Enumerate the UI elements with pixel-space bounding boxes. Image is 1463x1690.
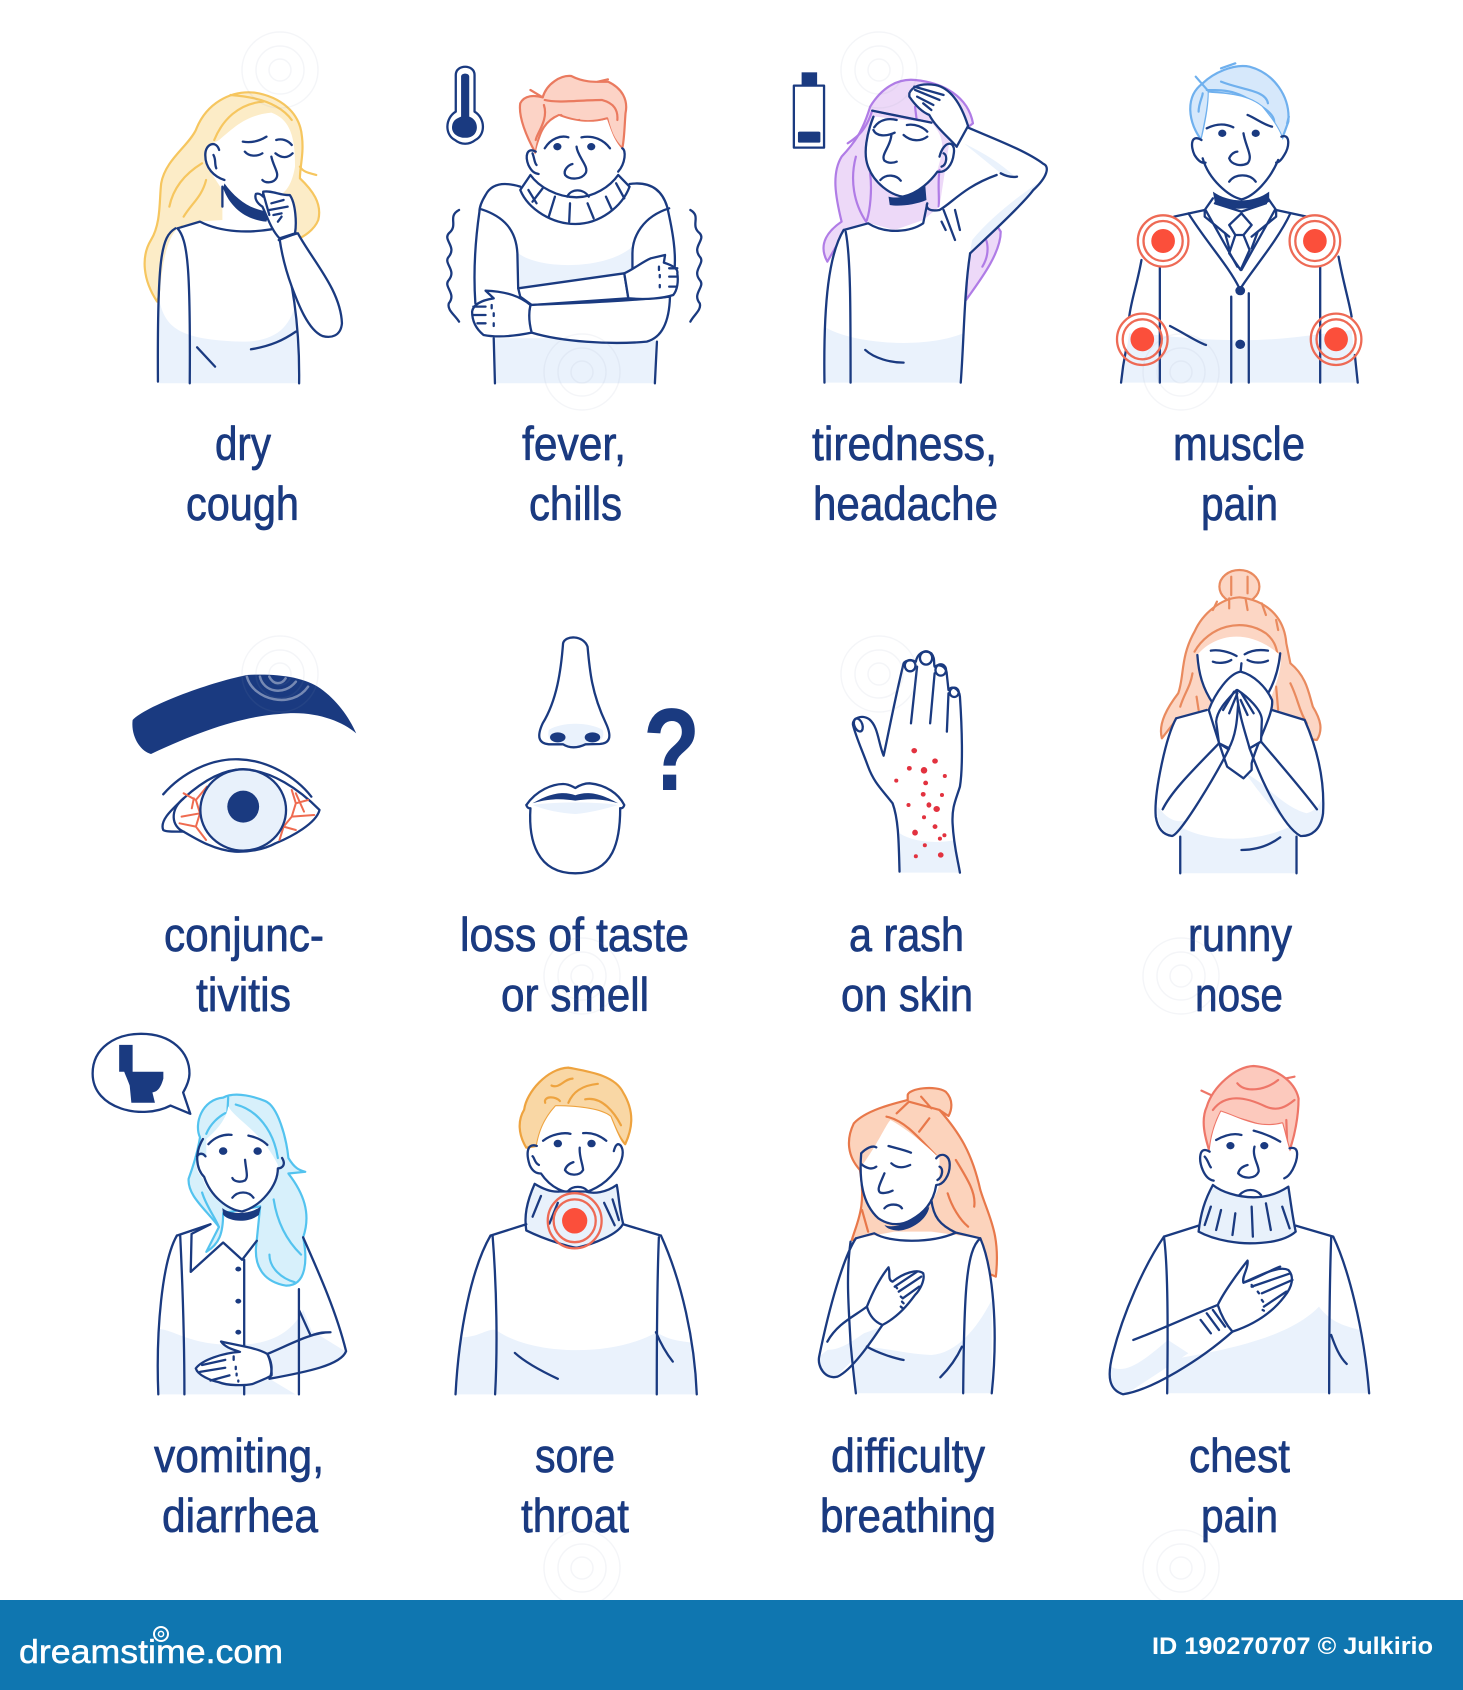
figure: hand with rash: [852, 651, 962, 873]
label: muscle pain: [1173, 417, 1305, 530]
label: runny nose: runny: [1188, 908, 1292, 961]
panel: runny nose: [1156, 570, 1323, 1021]
label: conjunc-tivitis: tivitis: [196, 968, 291, 1021]
label: fever, chills: chills: [529, 477, 622, 530]
eyebrow: [132, 675, 356, 754]
label: chest pain: pain: [1201, 1489, 1278, 1542]
label: a rash on skin: on skin: [841, 968, 973, 1021]
label: chest pain: [1189, 1429, 1290, 1542]
icon: pain ring on throat: [548, 1193, 602, 1248]
panel: dry cough: [145, 92, 342, 530]
label: a rash on skin: a rash: [849, 908, 964, 961]
label: runny nose: [1188, 908, 1292, 1021]
figure: man with sore throat: [456, 1068, 697, 1394]
label: dry cough: cough: [186, 477, 299, 530]
figure: woman with stomach ache: [93, 1034, 346, 1394]
label: tiredness, headache: tiredness,: [812, 417, 997, 470]
panel: tiredness, headache: [794, 72, 1047, 530]
label: conjunc-tivitis: conjunc-: [164, 908, 324, 961]
figure: woman coughing: [145, 92, 342, 383]
figure: nose, tongue and question mark: [526, 637, 624, 873]
label: sore throat: throat: [521, 1489, 629, 1542]
icon: pain ring, right elbow: [1311, 314, 1361, 365]
label: vomiting, diarrhea: vomiting,: [154, 1429, 324, 1482]
mouth and tongue: [526, 783, 624, 873]
figure: shivering man with thermometer: [447, 67, 701, 383]
icon: speech bubble with toilet: [93, 1034, 190, 1114]
logo: dreamstime.com: dreamstime.com: [19, 1633, 283, 1670]
icon: thermometer: [447, 67, 483, 144]
panel: difficulty breathing: [819, 1088, 997, 1542]
icon: question mark: ?: [643, 685, 700, 815]
panel: loss of taste or smell: [460, 637, 700, 1021]
label: tiredness, headache: headache: [813, 477, 998, 530]
label: muscle pain: muscle: [1173, 417, 1305, 470]
label: a rash on skin: [841, 908, 973, 1021]
label: sore throat: [521, 1429, 629, 1542]
icon: pain ring, left shoulder: [1138, 215, 1188, 267]
credit: image ID: ID 190270707 © Julkirio: [1152, 1633, 1433, 1660]
icon: low battery: [794, 72, 824, 148]
figure: woman blowing nose: [1156, 570, 1323, 873]
eye: [163, 759, 320, 852]
panel: a rash on skin: [841, 651, 973, 1021]
nose: [539, 637, 609, 747]
figure: man with joint pain: [1117, 63, 1361, 383]
label: difficulty breathing: difficulty: [831, 1429, 985, 1482]
label: sore throat: sore: [535, 1429, 615, 1482]
label: difficulty breathing: breathing: [820, 1489, 996, 1542]
label: tiredness, headache: [812, 417, 998, 530]
label: loss of taste or smell: or smell: [501, 968, 649, 1021]
label: dry cough: [186, 417, 299, 530]
label: muscle pain: pain: [1201, 477, 1278, 530]
label: fever, chills: fever,: [522, 417, 626, 470]
figure: red eye and eyebrow: [132, 675, 356, 852]
figure: woman with hand on chest: [819, 1088, 997, 1393]
label: fever, chills: [522, 417, 626, 530]
label: dry cough: dry: [215, 417, 271, 470]
label: vomiting, diarrhea: diarrhea: [162, 1489, 319, 1542]
footer band: [0, 1600, 1463, 1690]
label: vomiting, diarrhea: [154, 1429, 324, 1542]
panel: vomiting, diarrhea: [93, 1034, 346, 1542]
icon: pain ring, right shoulder: [1290, 215, 1340, 267]
panel: conjunctivitis: [132, 675, 356, 1021]
figure: man with hand on chest: [1109, 1066, 1369, 1394]
panel: fever, chills: [447, 67, 701, 530]
label: loss of taste or smell: loss of taste: [460, 908, 689, 961]
rash dots: [894, 748, 947, 858]
label: loss of taste or smell: [460, 908, 689, 1021]
panel: muscle pain: [1117, 63, 1361, 530]
label: conjunc-tivitis: [164, 908, 324, 1021]
label: chest pain: chest: [1189, 1429, 1290, 1482]
panel: chest pain: [1109, 1066, 1369, 1542]
label: difficulty breathing: [820, 1429, 996, 1542]
figure: tired woman holding head: [794, 72, 1047, 383]
icon: pain ring, left elbow: [1117, 314, 1168, 365]
label: runny nose: nose: [1195, 968, 1283, 1021]
panel: sore throat: [456, 1068, 697, 1542]
